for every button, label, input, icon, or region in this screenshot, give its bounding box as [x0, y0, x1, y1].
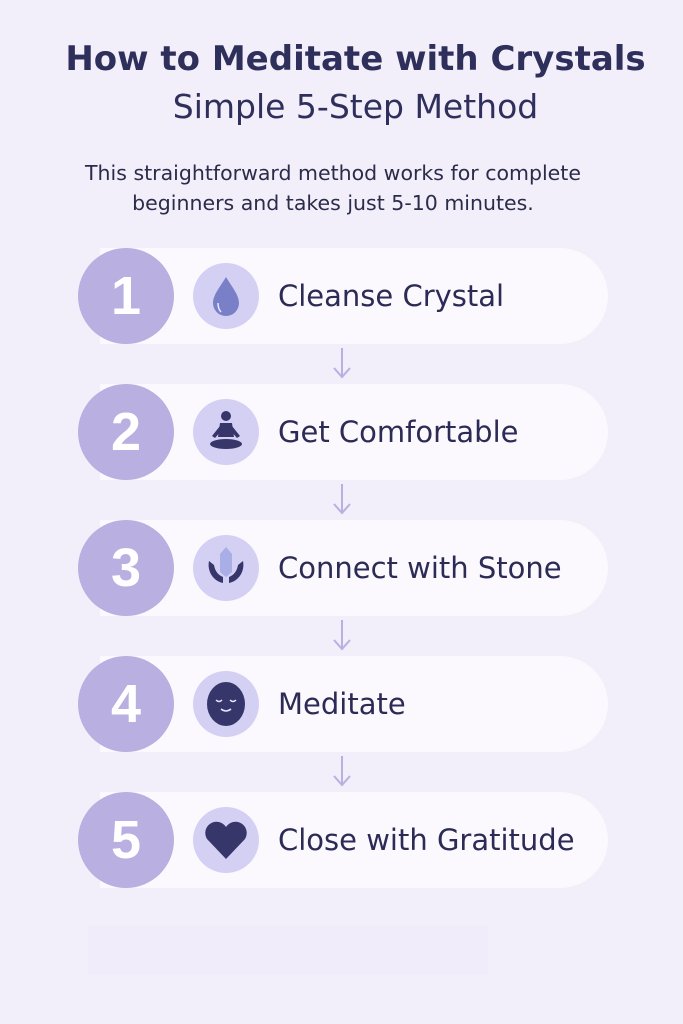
step 5: [78, 792, 608, 888]
icon: calm face: [193, 671, 259, 737]
title: How to Meditate with Crystals: [65, 39, 646, 79]
label: Cleanse Crystal: [278, 279, 504, 313]
subtitle: Simple 5-Step Method: [173, 87, 538, 126]
label: Connect with Stone: [278, 551, 562, 585]
step 5: 5: [111, 810, 141, 870]
arrow: [333, 348, 351, 378]
label: Meditate: [278, 687, 406, 721]
step 4: [78, 656, 608, 752]
icon: water drop: [193, 263, 259, 329]
faded footer: [88, 925, 488, 975]
step 2: 2: [111, 402, 141, 462]
step 1: [78, 248, 608, 344]
intro text: beginners and takes just 5-10 minutes.: [132, 191, 534, 215]
arrow: [333, 756, 351, 786]
step 4: 4: [111, 674, 141, 734]
label: Get Comfortable: [278, 415, 518, 449]
icon: heart: [193, 807, 259, 873]
intro text: [84, 161, 581, 215]
intro text: This straightforward method works for complete: [85, 161, 581, 185]
step 1: 1: [111, 266, 141, 326]
icon: meditating person: [193, 399, 259, 465]
step 2: [78, 384, 608, 480]
label: Close with Gratitude: [278, 823, 575, 857]
step 3: 3: [111, 538, 141, 598]
step 3: [78, 520, 608, 616]
arrow: [333, 620, 351, 650]
arrow: [333, 484, 351, 514]
icon: hands with crystal: [193, 535, 259, 601]
